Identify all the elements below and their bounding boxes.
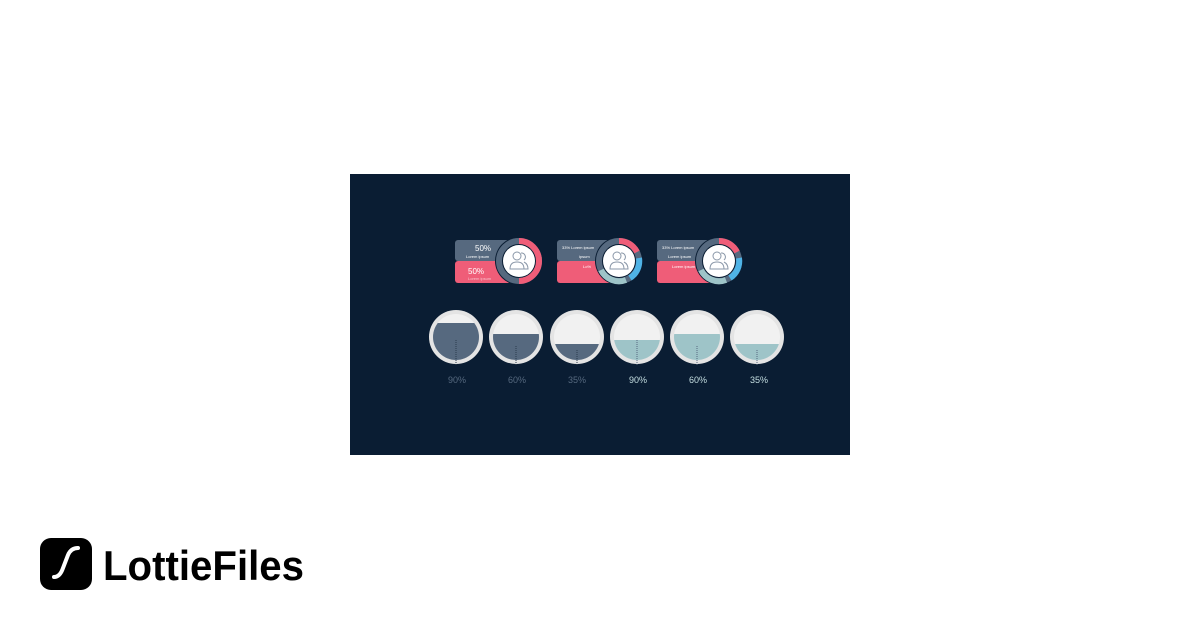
logo: LottieFiles: LottieFiles [103,542,304,589]
logo: LottieFiles [40,538,304,590]
card 1: Lorem ipsum [468,276,492,281]
card 2: ipsum [579,254,590,259]
card 1: 50% [468,267,484,276]
card 3 [657,237,743,285]
gauges row [429,310,784,365]
panel: dark animation preview [350,174,850,455]
card 1: Lorem ipsum [466,254,490,259]
card 1: 50% [475,244,491,253]
gauge labels: 90% [448,375,466,385]
gauge labels: 90% [629,375,647,385]
gauge labels: 35% [568,375,586,385]
card 1 [455,237,543,285]
card 2 [557,237,643,285]
gauge labels: 60% [508,375,526,385]
card 3: 33% Lorem ipsum [662,245,695,250]
gauge labels: 35% [750,375,768,385]
gauge labels [448,375,768,385]
card 2: 33% Lorem ipsum [562,245,595,250]
gauge labels: 60% [689,375,707,385]
icon: users [510,252,528,269]
card 3: Lorem ipsum [672,264,696,269]
card 3: Lorem ipsum [668,254,692,259]
card 2: Lo% [583,264,591,269]
